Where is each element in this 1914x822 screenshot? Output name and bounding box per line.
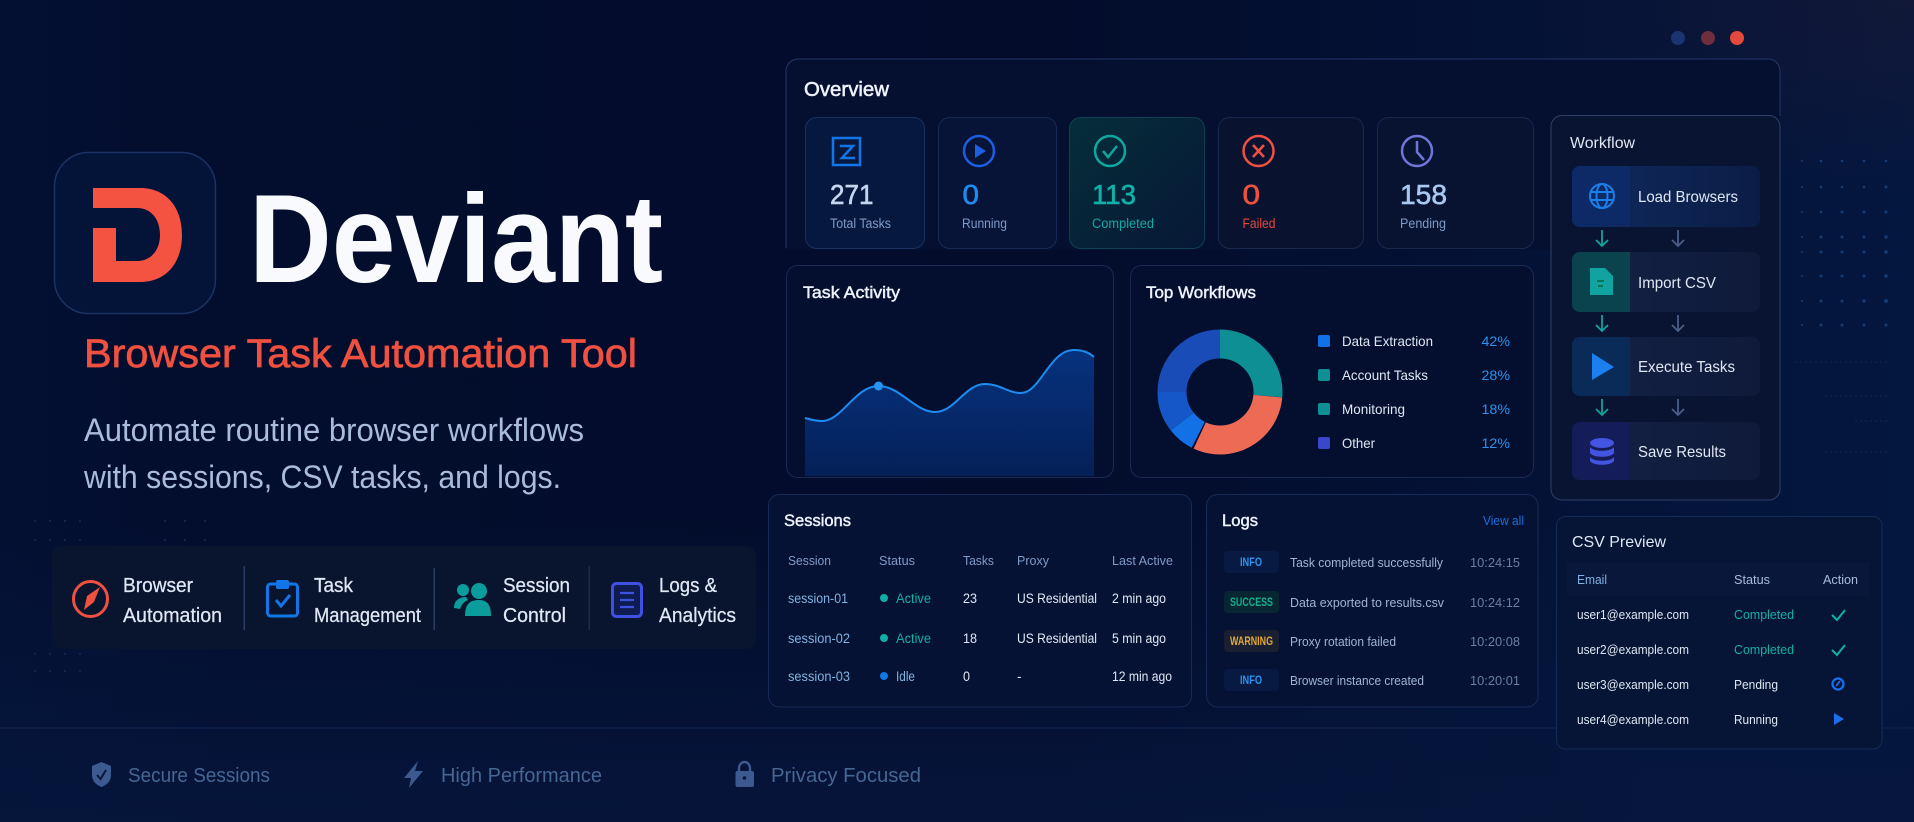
table header: Status	[1734, 572, 1770, 587]
legend: data extraction: 42%	[1482, 333, 1510, 349]
card: pending	[1378, 118, 1534, 248]
panel: csv preview	[1556, 516, 1882, 749]
panel: sessions	[768, 494, 1192, 707]
row: session-02: 18	[963, 631, 977, 646]
panel: feature bar	[52, 546, 756, 649]
log: task completed: 10:24:15	[1470, 555, 1520, 570]
row: user2: user2@example.com	[1577, 642, 1689, 657]
card: failed: Failed	[1242, 216, 1276, 231]
feature: logs and analytics: Logs &	[659, 575, 718, 597]
log: data exported	[1224, 591, 1520, 613]
legend: other: Other	[1342, 435, 1375, 451]
legend: other	[1318, 435, 1510, 451]
table header: Email	[1577, 572, 1607, 587]
feature: browser automation: Automation	[123, 605, 222, 627]
legend: account tasks: Account Tasks	[1342, 367, 1428, 383]
row: user2	[1577, 642, 1845, 657]
panel: overview	[786, 59, 1780, 250]
card: failed	[1218, 118, 1364, 248]
legend: monitoring	[1318, 401, 1510, 417]
area chart	[805, 350, 1094, 476]
row: session-01	[788, 591, 1166, 606]
panel: workflow	[1551, 116, 1780, 500]
row: session-02: 5 min ago	[1112, 631, 1166, 646]
row: user3: user3@example.com	[1577, 677, 1689, 692]
legend: other: 12%	[1482, 435, 1510, 451]
feature: browser automation	[74, 575, 222, 627]
row: user2: Completed	[1734, 642, 1794, 657]
row: user3	[1577, 677, 1844, 692]
card: completed: Completed	[1092, 216, 1154, 231]
description: with sessions, CSV tasks, and logs.	[83, 459, 561, 495]
arrows: workflow connectors	[1596, 230, 1684, 415]
card: pending: Pending	[1400, 216, 1446, 231]
card: running: 0	[962, 179, 979, 210]
row: session-03	[788, 669, 1172, 684]
heading: logs: Logs	[1222, 512, 1258, 530]
log: data exported: Data exported to results.csv	[1290, 595, 1444, 610]
link: view all: View all	[1483, 514, 1524, 528]
log: browser instance	[1224, 669, 1520, 691]
card: running	[938, 118, 1056, 248]
heading: csv preview: CSV Preview	[1572, 534, 1666, 551]
log: data exported: SUCCESS	[1230, 597, 1273, 609]
table header: Session	[788, 553, 831, 568]
legend: account tasks	[1318, 367, 1510, 383]
heading: sessions: Sessions	[784, 512, 851, 530]
step: execute tasks: Execute Tasks	[1638, 359, 1735, 376]
footer: high performance: High Performance	[441, 765, 602, 787]
row: user4	[1577, 712, 1844, 727]
legend: data extraction: Data Extraction	[1342, 333, 1433, 349]
feature: logs and analytics	[612, 575, 736, 627]
row: session-03: -	[1017, 669, 1022, 684]
row: session-02: session-02	[788, 631, 850, 646]
row: session-02: US Residential	[1017, 631, 1097, 646]
table header	[788, 553, 1173, 568]
row: session-01: US Residential	[1017, 591, 1097, 606]
row: user4: Running	[1734, 712, 1778, 727]
card: running: Running	[962, 216, 1007, 231]
table header: Proxy	[1017, 553, 1049, 568]
description: Automate routine browser workflows	[84, 412, 584, 448]
step: load browsers: Load Browsers	[1638, 189, 1738, 206]
legend: monitoring: 18%	[1482, 401, 1510, 417]
step: load browsers	[1572, 166, 1760, 227]
row: session-03: 0	[963, 669, 970, 684]
legend: data extraction	[1318, 333, 1510, 349]
step: save results: Save Results	[1638, 444, 1726, 461]
description	[83, 412, 584, 495]
footer: high performance	[404, 761, 602, 788]
panel: logs	[1206, 494, 1538, 707]
feature: logs and analytics: Analytics	[659, 605, 736, 627]
panel: task activity	[786, 266, 1114, 478]
card: completed: 113	[1092, 179, 1136, 210]
row: session-01: Active	[896, 591, 931, 606]
card: failed: 0	[1242, 179, 1260, 210]
row: session-02: Active	[896, 631, 931, 646]
legend: account tasks: 28%	[1482, 367, 1510, 383]
icon: Deviant logo	[54, 152, 216, 314]
log: browser instance: 10:20:01	[1470, 673, 1520, 688]
footer: secure sessions	[92, 762, 270, 787]
table header: Last Active	[1112, 553, 1173, 568]
heading: workflow: Workflow	[1570, 135, 1635, 152]
feature: task management: Management	[314, 605, 421, 627]
card: total tasks: Total Tasks	[830, 216, 891, 231]
step: import csv: Import CSV	[1638, 275, 1716, 292]
log: task completed: Task completed successfully	[1290, 555, 1443, 570]
feature: task management: Task	[314, 575, 354, 597]
log: data exported: 10:24:12	[1470, 595, 1520, 610]
step: import csv	[1572, 252, 1760, 312]
card: completed	[1070, 118, 1204, 248]
row: session-03: session-03	[788, 669, 850, 684]
card: total tasks	[806, 118, 924, 248]
window control dots	[1671, 31, 1744, 45]
row: session-03: 12 min ago	[1112, 669, 1172, 684]
heading: top workflows: Top Workflows	[1146, 284, 1256, 302]
legend: monitoring: Monitoring	[1342, 401, 1405, 417]
log: proxy rotation: Proxy rotation failed	[1290, 634, 1396, 649]
feature: task management	[268, 575, 421, 627]
log: task completed: INFO	[1240, 557, 1262, 569]
heading: overview: Overview	[804, 79, 890, 101]
card: pending: 158	[1400, 179, 1447, 210]
row: session-01: 2 min ago	[1112, 591, 1166, 606]
log: proxy rotation: 10:20:08	[1470, 634, 1520, 649]
table header	[1567, 563, 1870, 596]
feature: session control	[454, 575, 570, 627]
panel: top workflows	[1130, 266, 1534, 478]
row: session-02	[788, 631, 1166, 646]
row: session-01: 23	[963, 591, 977, 606]
step: execute tasks	[1572, 337, 1760, 396]
heading: task activity: Task Activity	[803, 284, 901, 302]
feature: browser automation: Browser	[123, 575, 193, 597]
card: total tasks: 271	[830, 179, 874, 210]
row: user1: Completed	[1734, 607, 1794, 622]
row: session-03: Idle	[896, 669, 915, 684]
table header: Tasks	[963, 553, 994, 568]
footer: privacy focused: Privacy Focused	[771, 765, 921, 787]
donut chart	[1153, 325, 1287, 459]
row: user1: user1@example.com	[1577, 607, 1689, 622]
feature: session control: Control	[503, 605, 566, 627]
log: browser instance: INFO	[1240, 675, 1262, 687]
table header: Action	[1823, 572, 1858, 587]
row: session-01: session-01	[788, 591, 848, 606]
subtitle: Browser Task Automation Tool	[84, 332, 637, 376]
log: task completed	[1224, 551, 1520, 573]
row: user4: user4@example.com	[1577, 712, 1689, 727]
table header: Status	[879, 553, 915, 568]
log: proxy rotation	[1224, 630, 1520, 652]
title: Deviant: Deviant	[249, 170, 663, 309]
log: proxy rotation: WARNING	[1230, 636, 1273, 648]
row: user3: Pending	[1734, 677, 1778, 692]
row: user1	[1577, 607, 1845, 622]
feature: session control: Session	[503, 575, 570, 597]
step: save results	[1572, 422, 1760, 480]
footer: secure sessions: Secure Sessions	[128, 765, 270, 787]
log: browser instance: Browser instance created	[1290, 673, 1424, 688]
